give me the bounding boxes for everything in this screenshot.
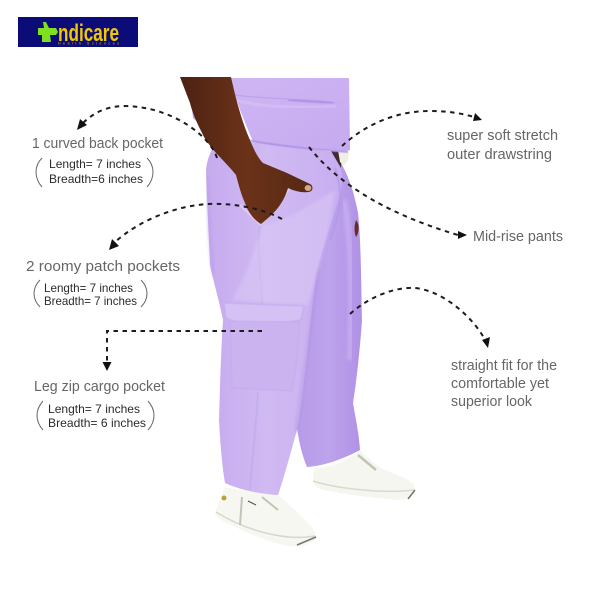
heading: 1 curved back pocket	[32, 135, 164, 152]
cargo pocket flap	[224, 303, 304, 324]
icon: rear white sneaker	[313, 450, 415, 500]
arrow: drawstring	[342, 111, 482, 146]
right bracket	[141, 280, 147, 307]
left bracket	[34, 280, 40, 307]
breadth: Breadth= 7 inches	[44, 294, 137, 308]
right bracket	[147, 158, 153, 187]
text block: straight fit: comfortable yet	[451, 375, 550, 392]
fingernail	[305, 185, 311, 191]
side pocket opening	[240, 188, 290, 224]
back leg of trousers	[280, 152, 362, 467]
text block: straight fit	[451, 357, 557, 410]
arrow: cargo pocket	[102, 331, 262, 371]
length: Length= 7 inches	[48, 402, 140, 416]
right edge highlight	[344, 200, 351, 360]
text block: curved back pocket	[32, 135, 164, 187]
logo tagline: Health Sciences	[58, 42, 119, 46]
icon: fingers on far side	[354, 220, 359, 237]
waist drawstring	[338, 150, 349, 166]
length: Length= 7 inches	[44, 281, 133, 295]
arm and hand	[180, 77, 312, 224]
left bracket	[37, 401, 43, 430]
icon: front white sneaker	[215, 487, 316, 546]
text block: drawstring: outer drawstring	[447, 146, 552, 163]
arrow: mid-rise	[309, 147, 467, 239]
shirt	[192, 78, 350, 152]
text block: cargo pocket	[34, 378, 166, 430]
model figure	[180, 77, 415, 546]
text block: straight fit: superior look	[451, 393, 532, 410]
icon: green cross	[38, 22, 58, 42]
left shadow	[207, 175, 214, 275]
left bracket	[36, 158, 42, 187]
length: Length= 7 inches	[49, 157, 141, 171]
text block: drawstring: super soft stretch	[447, 127, 558, 144]
arrow: patch pockets	[109, 204, 282, 250]
logo	[18, 17, 138, 47]
arrow: straight fit	[350, 288, 490, 348]
arrow: curved back pocket	[77, 106, 217, 158]
highlight panel	[232, 190, 335, 305]
fly seam	[330, 168, 340, 240]
text block: drawstring	[447, 127, 558, 163]
dark gap at waist	[331, 151, 342, 168]
crease shadow	[296, 270, 318, 432]
breadth: Breadth=6 inches	[49, 172, 143, 186]
side seam	[250, 226, 262, 490]
breadth: Breadth= 6 inches	[48, 416, 146, 430]
heading: Leg zip cargo pocket	[34, 378, 166, 395]
right bracket	[148, 401, 154, 430]
logo wordmark: ndicare	[58, 20, 119, 47]
text block: mid-rise: Mid-rise pants	[473, 228, 563, 245]
cargo pocket	[230, 321, 300, 391]
text block: patch pockets	[26, 258, 180, 308]
front trouser leg	[206, 142, 342, 495]
heading: 2 roomy patch pockets	[26, 258, 180, 275]
text block: straight fit: straight fit for the	[451, 357, 557, 374]
